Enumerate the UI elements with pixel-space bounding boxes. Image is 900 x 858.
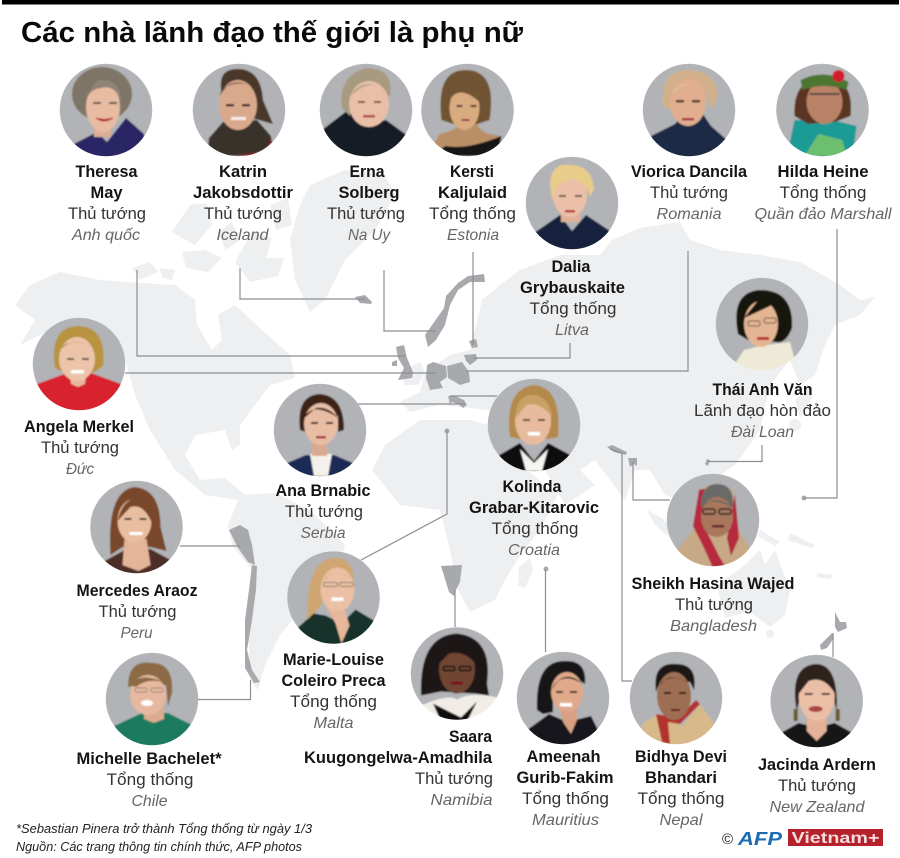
label: Thủ tướng: [327, 205, 405, 223]
label: Theresa: [76, 163, 138, 181]
profile: Erna Solberg: [319, 63, 413, 244]
label: Namibia: [430, 792, 493, 809]
label: Coleiro Preca: [282, 672, 386, 690]
label: Romania: [656, 206, 722, 223]
portrait: [420, 63, 514, 157]
profile: Thái Anh Văn: [694, 277, 831, 441]
label: Kuugongelwa-Amadhila: [304, 749, 493, 767]
label: Grabar-Kitarovic: [469, 499, 599, 517]
portrait: [410, 626, 504, 722]
label: Thủ tướng: [778, 777, 856, 795]
label: May: [90, 184, 123, 202]
label: Serbia: [300, 525, 346, 542]
Norway: [425, 274, 485, 347]
label: Lãnh đạo hòn đảo: [694, 402, 831, 420]
Peru: [229, 525, 255, 565]
portrait: [286, 550, 380, 646]
logo: AFP Vietnam+: Vietnam+: [792, 830, 880, 847]
label: [276, 482, 370, 542]
label: Na Uy: [348, 227, 391, 244]
profile: Marie-Louise Coleiro Preca: [282, 550, 386, 732]
label: Marie-Louise: [283, 651, 384, 669]
profile: Dalia Grybauskaite: [520, 156, 625, 339]
label: Bidhya Devi: [635, 748, 727, 766]
label: [76, 750, 222, 810]
footnote and source: Nguồn: Các trang thông tin chính thức, AFP photos: [16, 840, 302, 854]
Taiwan: [705, 459, 710, 466]
profile: Michelle Bachelet: [76, 652, 222, 810]
Estonia: [469, 339, 478, 348]
label: Thái Anh Văn: [712, 381, 812, 399]
label: [631, 163, 748, 223]
label: Thủ tướng: [41, 439, 119, 457]
label: Michelle Bachelet*: [76, 750, 222, 768]
label: [758, 756, 876, 816]
portrait: [59, 63, 153, 158]
label: Tổng thống: [522, 790, 609, 808]
label: Kersti: [450, 163, 494, 181]
footnote and source: *Sebastian Pinera trở thành Tổng thống từ ngày 1/3: [16, 822, 312, 836]
logo: AFP Vietnam+: ©: [722, 831, 733, 848]
portrait: [666, 473, 760, 568]
title: Các nhà lãnh đạo thế giới là phụ nữ: [21, 17, 523, 49]
label: Thủ tướng: [415, 770, 493, 788]
label: Anh quốc: [71, 227, 140, 244]
label: Thủ tướng: [650, 184, 728, 202]
label: [193, 163, 294, 244]
label: Hilda Heine: [778, 163, 868, 181]
portrait: [273, 383, 367, 478]
profile: Bidhya Devi Bhandari: [629, 651, 727, 829]
profile: Katrin Jakobsdottir: [192, 63, 294, 244]
profile: Ameenah Gurib-Fakim: [516, 651, 614, 829]
label: [694, 381, 831, 441]
portrait: [516, 651, 610, 746]
Lithuania: [464, 354, 477, 365]
label: New Zealand: [770, 799, 866, 816]
portrait: [487, 378, 581, 473]
label: Thủ tướng: [98, 603, 176, 621]
profile: Saara Kuugongelwa-Amadhila: [304, 626, 504, 809]
label: [24, 418, 134, 478]
label: [635, 748, 727, 829]
label: Ameenah: [526, 748, 600, 766]
label: Mercedes Araoz: [76, 582, 198, 600]
label: Đức: [66, 461, 94, 478]
label: Quần đảo Marshall: [754, 206, 892, 223]
Nepal: [607, 445, 627, 455]
logo: AFP Vietnam+: [722, 829, 883, 849]
label: Viorica Dancila: [631, 163, 748, 181]
profile: Sheikh Hasina Wajed: [632, 473, 794, 635]
label: [429, 163, 516, 244]
label: Tổng thống: [638, 790, 724, 808]
label: Tổng thống: [530, 300, 616, 318]
label: Sheikh Hasina Wajed: [632, 575, 794, 593]
label: Tổng thống: [290, 693, 377, 711]
label: [754, 163, 892, 223]
profile: Angela Merkel: [24, 317, 134, 478]
connector lines: [125, 229, 837, 700]
profile: Ana Brnabic: [273, 383, 370, 542]
logo: AFP Vietnam+: AFP: [737, 829, 783, 849]
portrait: [105, 652, 199, 747]
label: Bangladesh: [670, 618, 757, 635]
Namibia: [441, 565, 462, 596]
label: [304, 728, 493, 809]
label: Kolinda: [502, 478, 562, 496]
top bar: [2, 0, 899, 4]
label: Peru: [120, 625, 153, 642]
portrait: [525, 156, 619, 251]
label: Katrin: [219, 163, 267, 181]
label: Chile: [132, 793, 168, 810]
portrait: [715, 277, 809, 372]
UK and Ireland: [392, 345, 413, 380]
profile: Kersti Kaljulaid: [420, 63, 516, 244]
label: Thủ tướng: [675, 596, 753, 614]
label: [76, 582, 198, 642]
profile: Viorica Dancila: [631, 63, 748, 223]
label: [520, 258, 625, 339]
label: [327, 163, 405, 244]
portrait: [642, 63, 736, 158]
label: Dalia: [552, 258, 591, 276]
profile: Hilda Heine: [754, 63, 892, 223]
label: Tổng thống: [492, 520, 578, 538]
profile: Mercedes Araoz: [76, 480, 198, 642]
portrait: [776, 63, 870, 158]
label: Saara: [449, 728, 493, 746]
portrait: [90, 480, 184, 575]
New Zealand: [820, 612, 847, 650]
portrait: [319, 63, 413, 158]
label: [68, 163, 146, 244]
label: Solberg: [338, 184, 400, 202]
label: Tổng thống: [429, 205, 516, 223]
label: Thủ tướng: [204, 205, 282, 223]
label: Malta: [314, 715, 354, 732]
label: [282, 651, 386, 732]
label: Iceland: [216, 227, 270, 244]
label: Estonia: [447, 227, 499, 244]
label: Nepal: [660, 812, 703, 829]
label: Thủ tướng: [285, 503, 363, 521]
label: Jakobsdottir: [193, 184, 294, 202]
label: Jacinda Ardern: [758, 756, 876, 774]
label: Thủ tướng: [68, 205, 146, 223]
label: Kaljulaid: [438, 184, 507, 202]
label: [632, 575, 794, 635]
Romania: [447, 362, 470, 385]
label: Ana Brnabic: [276, 482, 370, 500]
Serbia and Croatia: [448, 396, 467, 408]
Chile: [245, 565, 260, 683]
Iceland: [355, 295, 372, 304]
profile: Jacinda Ardern: [758, 654, 876, 816]
label: [469, 478, 599, 559]
Bangladesh: [628, 458, 637, 467]
label: Đài Loan: [731, 424, 794, 441]
portrait: [770, 654, 864, 749]
label: Mauritius: [532, 812, 599, 829]
label: Erna: [350, 163, 385, 181]
label: Litva: [555, 322, 589, 339]
label: Grybauskaite: [520, 279, 625, 297]
footnote and source: [16, 822, 312, 854]
label: Gurib-Fakim: [516, 769, 614, 787]
portrait: [192, 63, 286, 157]
label: Bhandari: [645, 769, 717, 787]
label: Angela Merkel: [24, 418, 134, 436]
label: Tổng thống: [780, 184, 866, 202]
label: Croatia: [508, 542, 560, 559]
Germany: [426, 362, 447, 390]
label: Tổng thống: [106, 771, 194, 789]
world map: [15, 170, 875, 690]
profile: Theresa May: [59, 63, 153, 244]
portrait: [32, 317, 126, 412]
profile: Kolinda Grabar-Kitarovic: [469, 378, 599, 559]
portrait: [629, 651, 723, 746]
label: [516, 748, 614, 829]
